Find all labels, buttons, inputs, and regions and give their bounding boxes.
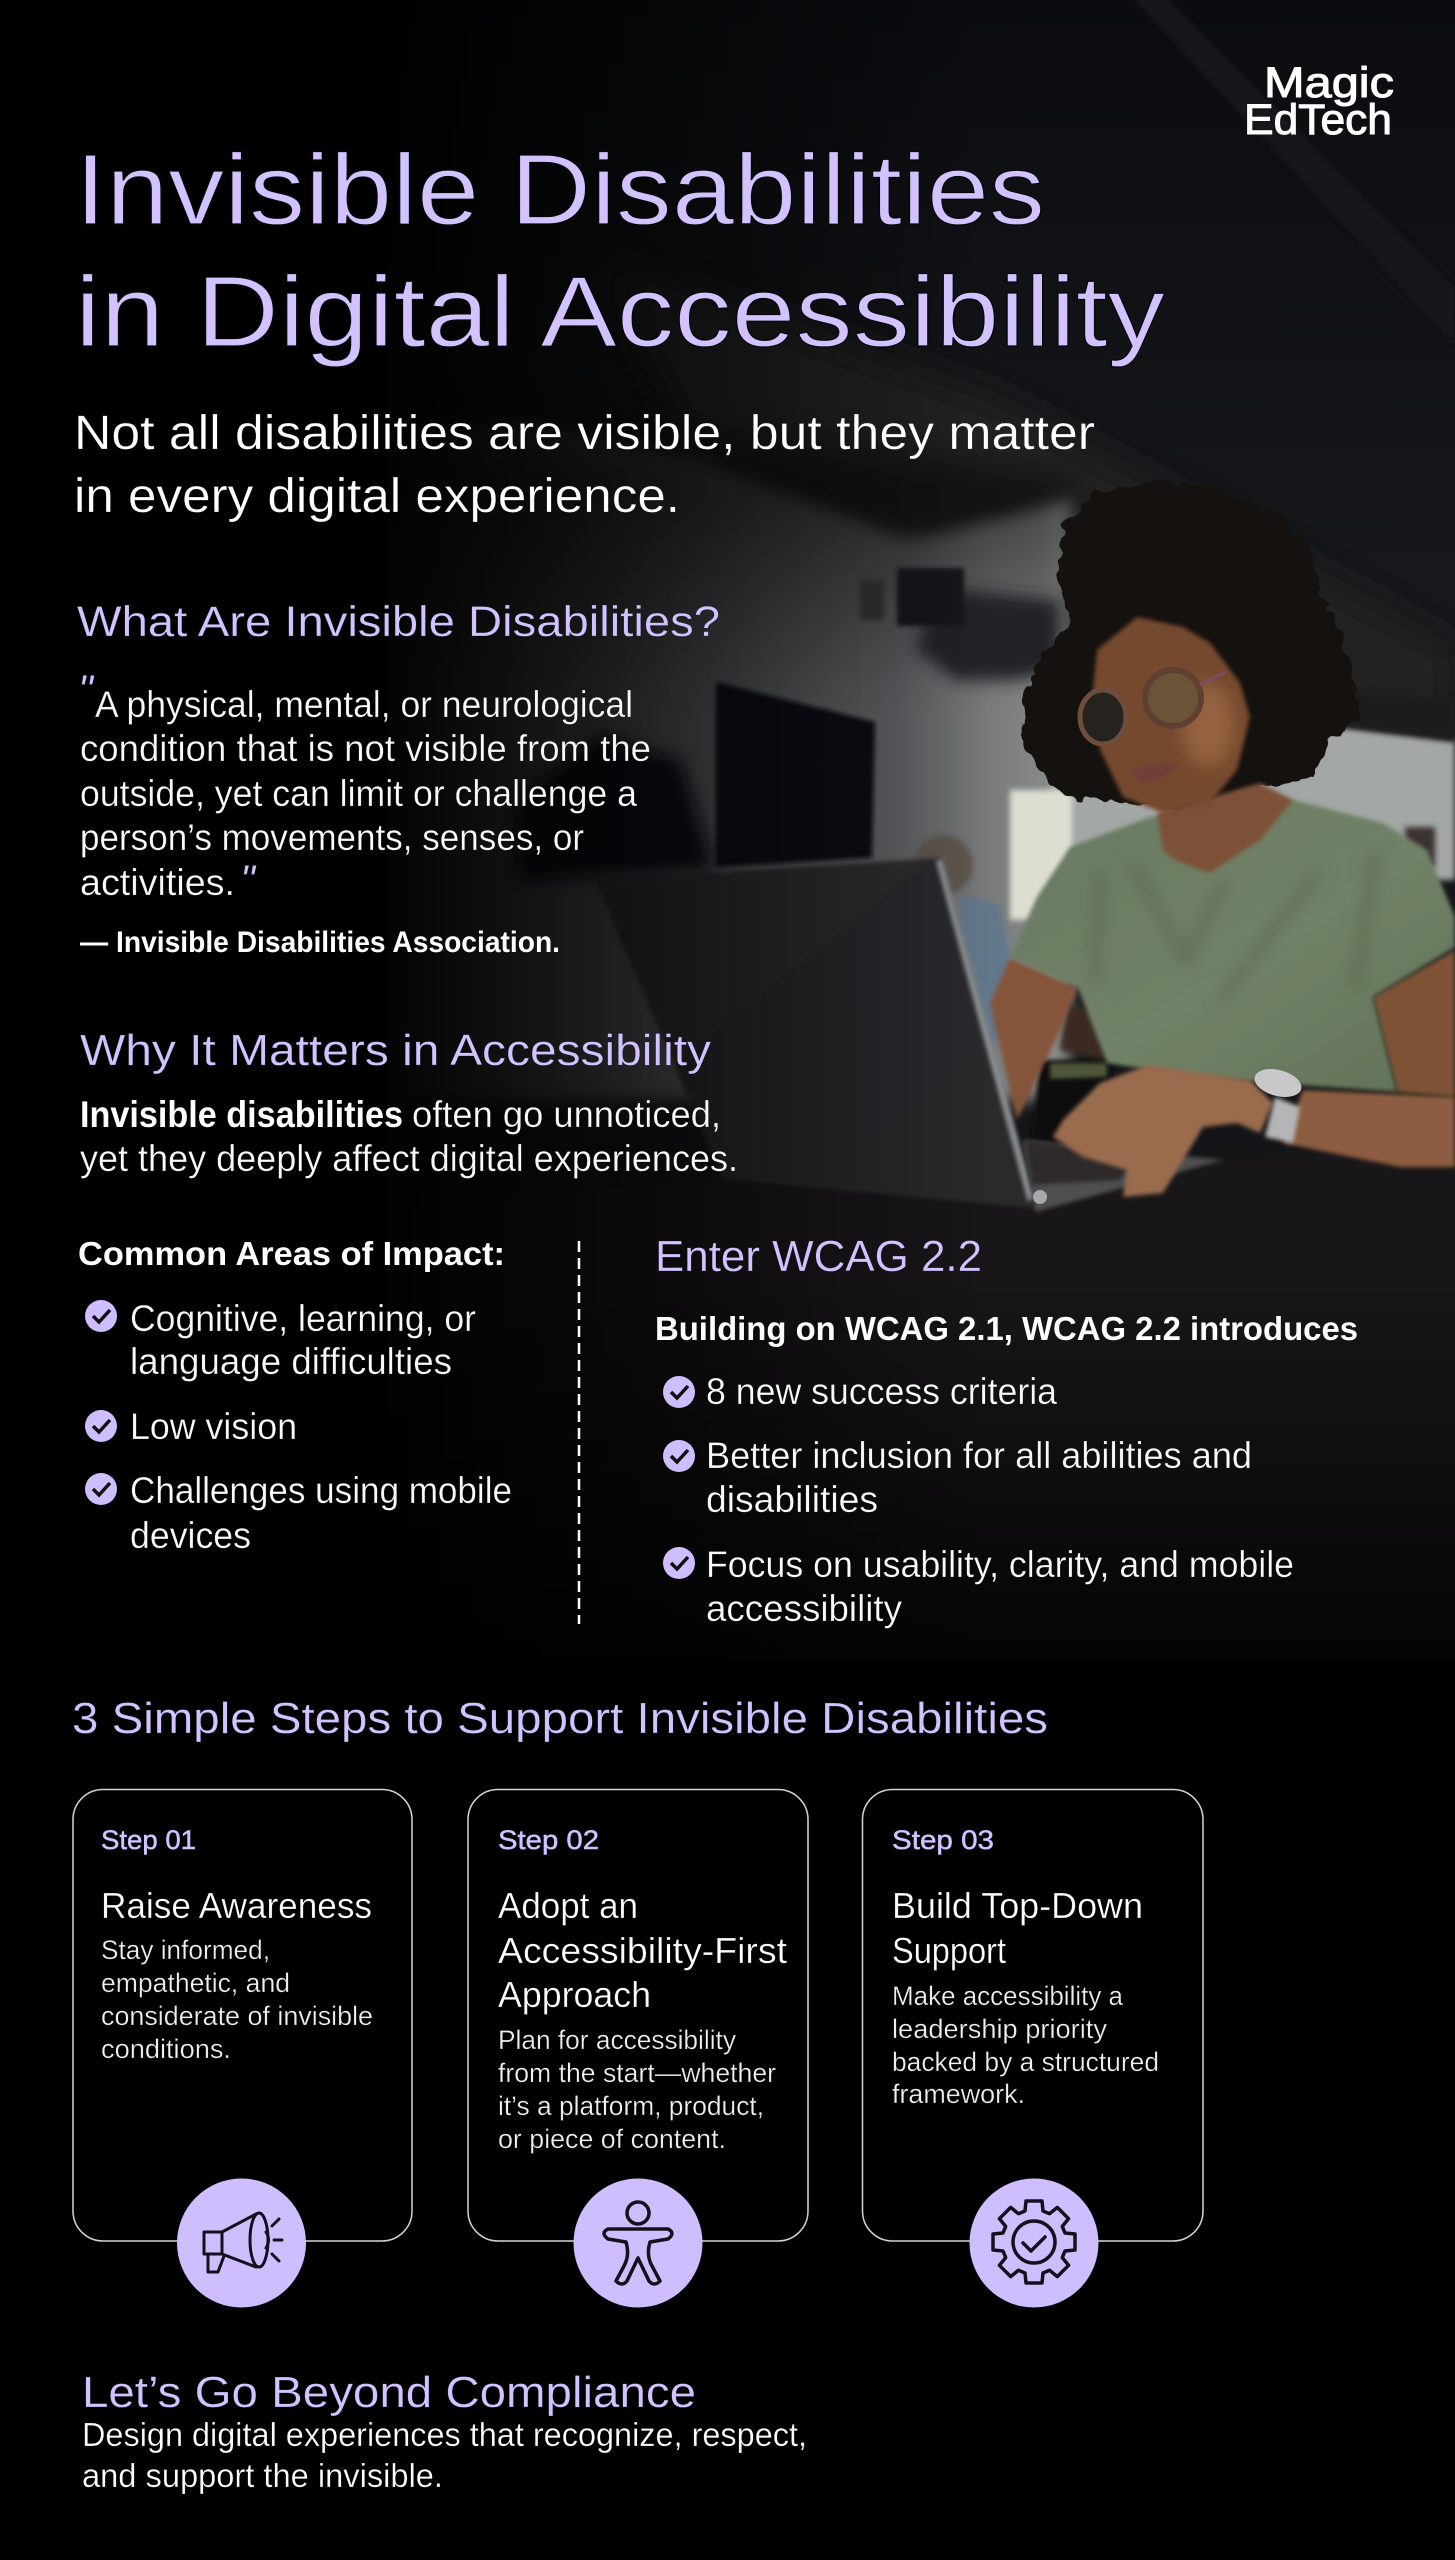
card: step 02: or piece of content. [498, 2124, 726, 2154]
list item: mobile [85, 1470, 512, 1556]
quote block: " [240, 856, 257, 903]
card: step 02: from the start—whether [498, 2058, 776, 2088]
quote block: A physical, mental, or neurological [95, 684, 633, 725]
card: step 01: empathetic, and [101, 1968, 290, 1998]
card: step 02 [468, 1790, 808, 2241]
card: step 03: Support [892, 1930, 1006, 1971]
logo: EdTech [1244, 96, 1392, 144]
quote block [78, 666, 651, 959]
card: step 02: Accessibility-First [498, 1930, 787, 1971]
closing heading: Let’s Go Beyond Compliance [82, 2368, 696, 2417]
closing text: and support the invisible. [82, 2457, 443, 2494]
card: step 02: it’s a platform, product, [498, 2091, 764, 2121]
logo: Magic [1264, 59, 1394, 107]
subtitle [74, 407, 1095, 523]
card: step 01 [73, 1790, 412, 2241]
quote block: — Invisible Disabilities Association. [80, 926, 560, 959]
card: step 03: Step 03 [892, 1825, 994, 1855]
why it matters text: Invisible disabilities [80, 1094, 403, 1135]
card: step 03 [862, 1790, 1203, 2241]
hair [1022, 480, 1360, 810]
why it matters text: often go unnoticed, [412, 1094, 721, 1135]
list item: new criteria: 8 new success criteria [706, 1371, 1057, 1412]
quote block: activities. [80, 862, 235, 903]
card: step 01: conditions. [101, 2034, 231, 2064]
heading: why it matters: Why It Matters in Accessibility [80, 1026, 711, 1075]
card: step 02: Approach [498, 1974, 651, 2015]
card: step 02: Plan for accessibility [498, 2025, 736, 2055]
card: step 03: Make accessibility a [892, 1981, 1124, 2011]
quote block: " [78, 666, 95, 713]
list item: inclusion [663, 1435, 1252, 1520]
icon: megaphone [177, 2178, 306, 2308]
title [75, 134, 1165, 368]
card: step 01: Stay informed, [101, 1935, 270, 1965]
quote block: person’s movements, senses, or [80, 817, 584, 858]
quote block: condition that is not visible from the [80, 728, 651, 769]
card: step 02: Step 02 [498, 1825, 599, 1855]
subtitle: in every digital experience. [74, 470, 680, 523]
card: step 01: Step 01 [101, 1825, 196, 1855]
heading: 3 simple steps: 3 Simple Steps to Support Invisible Disabilities [72, 1694, 1048, 1743]
list item: inclusion: Better inclusion for all abilities and [706, 1435, 1252, 1476]
closing text: Design digital experiences that recognize, respect, [82, 2416, 807, 2453]
title: in Digital Accessibility [75, 256, 1165, 368]
card: step 03: framework. [892, 2079, 1025, 2109]
card: step 03: leadership priority [892, 2014, 1107, 2044]
list item: focus: Focus on usability, clarity, and mobile [706, 1544, 1294, 1585]
list item: cognitive [85, 1298, 476, 1382]
enter wcag 2.2: Building on WCAG 2.1, WCAG 2.2 introduces [655, 1310, 1358, 1347]
why it matters text: yet they deeply affect digital experiences. [80, 1138, 738, 1179]
list item: low vision: Low vision [130, 1406, 297, 1447]
card: step 01: Raise Awareness [101, 1885, 372, 1926]
quote block: outside, yet can limit or challenge a [80, 773, 637, 814]
common areas of impact: Common Areas of Impact: [78, 1235, 505, 1272]
list item: cognitive: language difficulties [130, 1341, 452, 1382]
subtitle: Not all disabilities are visible, but they matter [74, 407, 1095, 460]
enter wcag 2.2 [655, 1232, 1358, 1629]
card: step 03: Build Top-Down [892, 1885, 1143, 1926]
closing text [82, 2416, 807, 2494]
heading: what are invisible disabilities: What Are Invisible Disabilities? [77, 598, 720, 646]
card: step 02: Adopt an [498, 1885, 638, 1926]
list item: mobile: Challenges using mobile [130, 1470, 512, 1511]
icon: accessibility figure [574, 2178, 702, 2308]
icon: gear with check [970, 2178, 1098, 2308]
logo [1244, 59, 1394, 144]
list item: focus [663, 1544, 1294, 1629]
list item: cognitive: Cognitive, learning, or [130, 1298, 476, 1339]
card: step 03: backed by a structured [892, 2047, 1159, 2077]
list item: inclusion: disabilities [706, 1479, 878, 1520]
list item: mobile: devices [130, 1515, 251, 1556]
card: step 01: considerate of invisible [101, 2001, 373, 2031]
why it matters text [80, 1094, 738, 1179]
enter wcag 2.2: Enter WCAG 2.2 [655, 1232, 982, 1281]
photo: woman working on a laptop [388, 0, 1455, 1660]
title: Invisible Disabilities [75, 134, 1045, 246]
list item: focus: accessibility [706, 1588, 902, 1629]
common areas of impact [78, 1235, 512, 1556]
